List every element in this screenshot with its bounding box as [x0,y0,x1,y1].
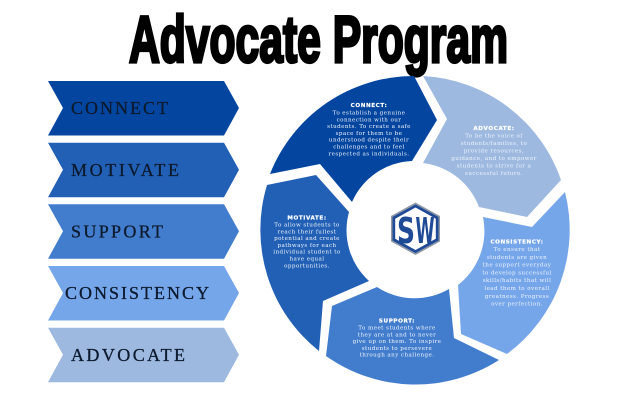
segment: support: through any challenge. [360,353,434,359]
segment: connect: To establish a genuine [333,110,406,116]
segment: advocate: ADVOCATE: [473,126,515,132]
chevron: consistency [48,266,239,320]
segment: connect: space for them to be [336,131,403,137]
chevron: motivate: MOTIVATE [71,160,179,180]
segment: motivate: reach their fullest [278,229,337,235]
segment: consistency: to develop successful [482,270,552,276]
chevron: support: SUPPORT [71,222,163,242]
icon: SW logo [391,202,440,255]
segment: advocate: To be the voice of [465,134,523,140]
segment: motivate: MOTIVATE: [287,216,327,222]
cycle diagram [260,76,570,385]
segment: connect: challenges and to feel [333,144,405,150]
segment: support: students to persevere [362,346,433,352]
chevron: advocate [48,328,239,382]
segment: consistency: CONSISTENCY: [490,240,544,246]
chevron: advocate: ADVOCATE [71,345,185,365]
segment: motivate: pathways for each [277,243,337,249]
segment: motivate: opportunities. [284,263,330,269]
segment: advocate: students/families, to [461,141,527,147]
chevron list [48,81,239,382]
segment: consistency: greatness. Progress [485,294,549,300]
segment: connect [270,76,437,202]
segment: connect: CONNECT: [351,103,387,109]
segment: connect: understood despite their [329,138,409,144]
chevron: connect [48,81,239,136]
segment: motivate: have equal [289,256,325,262]
segment: support: give up on them. To inspire [353,339,442,345]
segment: consistency: over perfection. [491,302,543,308]
segment: connect: connection with our [337,117,401,123]
chevron: support [48,204,239,259]
segment: advocate: provide resources, [464,148,524,154]
segment: consistency [458,192,570,354]
segment: consistency: To ensure that [494,247,541,253]
segment: motivate: To allow students to [274,222,340,228]
segment: support: To meet students where [358,326,436,332]
segment: advocate [423,76,561,217]
icon: SW logo: W [416,211,434,252]
segment: connect: respected as individuals. [329,151,409,157]
chevron: consistency: CONSISTENCY [65,283,209,303]
segment: advocate: successful future. [465,171,523,177]
segment: support [326,287,499,385]
segment: motivate: potential and create [274,236,340,242]
segment: support: SUPPORT: [379,318,415,324]
segment: consistency: lead them to overall [484,286,550,292]
segment: motivate [260,175,369,351]
segment: consistency: students are given [487,255,547,261]
segment: motivate: individual student to [273,250,341,256]
segment: advocate: students to strive for a [457,164,532,170]
segment: consistency: the support everyday [483,263,552,269]
segment: consistency: skills/habits that will [483,278,551,284]
chevron: connect: CONNECT [71,98,168,118]
icon: SW logo: S [397,211,415,252]
segment: advocate: guidance, and to empower [451,156,537,162]
chevron: motivate [48,143,239,197]
segment: connect: students. To create a safe [327,124,411,130]
segment: support: they are at and to never [358,332,436,338]
